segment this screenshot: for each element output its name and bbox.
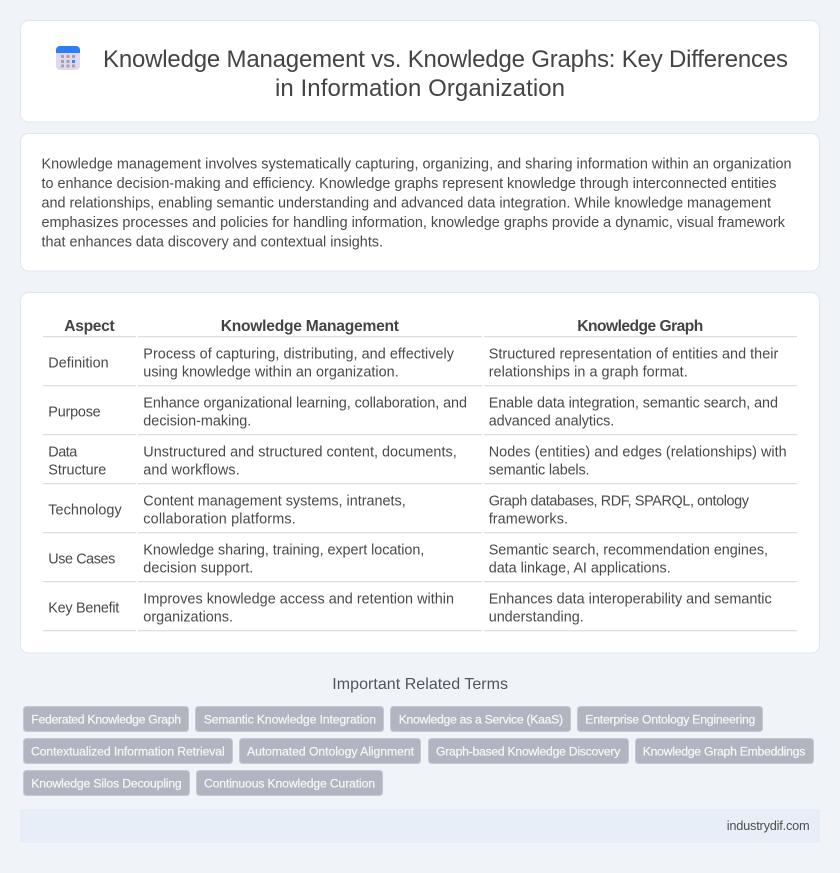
table row: Key Benefit: understanding. — [489, 609, 584, 625]
table header row: Aspect — [64, 318, 115, 335]
table row: Definition — [43, 346, 797, 386]
icon: calendar — [56, 46, 80, 70]
tag: Automated Ontology Alignment — [247, 744, 415, 758]
table row: Data Structure: Unstructured and structured content, documents, — [143, 444, 457, 460]
table row: Purpose — [43, 395, 797, 435]
tag — [196, 706, 384, 732]
table row: Data Structure — [43, 444, 797, 484]
table row: Purpose: Enable data integration, semantic search, and — [489, 395, 778, 411]
table row: Key Benefit: Key Benefit — [48, 600, 119, 616]
tag — [24, 706, 188, 732]
table row: Purpose: Enhance organizational learning, collaboration, and — [143, 395, 467, 411]
text block: summary: and relationships, enabling semantic understanding and advanced data integration. While knowledge management — [42, 195, 771, 211]
table row: Data Structure: Data — [48, 444, 77, 460]
text block: summary: emphasizes processes and policies for handling information, knowledge graphs provide a dynamic, visual framework — [42, 215, 786, 231]
text block: summary — [42, 156, 792, 250]
text block: summary: that enhances data discovery and contextual insights. — [42, 234, 383, 250]
title — [103, 46, 788, 102]
tag — [636, 738, 814, 764]
tag: Continuous Knowledge Curation — [204, 776, 375, 790]
table header row: Knowledge Graph — [577, 318, 703, 335]
tag — [390, 706, 570, 732]
title: Knowledge Management vs. Knowledge Graphs: Key Differences — [103, 46, 788, 73]
table row: Technology: Content management systems, intranets, — [143, 493, 406, 509]
related terms tags — [24, 706, 814, 796]
table row: Purpose: Purpose — [48, 404, 101, 420]
table row: Data Structure: Structure — [48, 462, 106, 478]
table row: Technology: frameworks. — [489, 511, 568, 527]
tag: Knowledge Silos Decoupling — [31, 776, 182, 790]
tag: Knowledge as a Service (KaaS) — [399, 712, 563, 726]
table row: Key Benefit — [43, 591, 797, 631]
panel: comparison table — [20, 292, 820, 653]
table row: Use Cases: decision support. — [143, 560, 253, 576]
tag — [24, 770, 190, 796]
heading: Important Related Terms: Important Related Terms — [332, 676, 508, 693]
tag — [240, 738, 420, 764]
table row: Technology: Technology — [48, 502, 122, 518]
tag — [24, 738, 232, 764]
title: in Information Organization — [275, 75, 565, 102]
table row: Technology — [43, 493, 797, 533]
footer — [20, 809, 820, 843]
tag: Enterprise Ontology Engineering — [585, 712, 755, 726]
panel: summary paragraph — [20, 134, 820, 271]
tag: Contextualized Information Retrieval — [31, 744, 225, 758]
table row: Definition: using knowledge within an organization. — [143, 364, 399, 380]
table row: Technology: Graph databases, RDF, SPARQL, ontology — [489, 493, 750, 509]
table row: Definition: relationships in a graph format. — [489, 364, 688, 380]
panel: title card — [20, 20, 820, 122]
tag — [578, 706, 762, 732]
table header row: Knowledge Management — [221, 318, 399, 335]
table row: Use Cases — [43, 542, 797, 582]
table row: Data Structure: semantic labels. — [489, 462, 590, 478]
footer: industrydif.com — [727, 818, 810, 833]
table row: Technology: collaboration platforms. — [143, 511, 296, 527]
table row: Data Structure: and workflows. — [143, 462, 240, 478]
table row: Data Structure: Nodes (entities) and edges (relationships) with — [489, 444, 787, 460]
table row: Use Cases: Semantic search, recommendation engines, — [489, 542, 768, 558]
table row: Use Cases: Use Cases — [48, 551, 115, 567]
tag: Federated Knowledge Graph — [31, 712, 181, 726]
table row: Key Benefit: Improves knowledge access and retention within — [143, 591, 454, 607]
table row: Use Cases: Knowledge sharing, training, expert location, — [143, 542, 424, 558]
tag: Semantic Knowledge Integration — [204, 712, 376, 726]
tag: Knowledge Graph Embeddings — [643, 744, 805, 758]
table header row — [43, 318, 797, 337]
tag: Graph-based Knowledge Discovery — [436, 744, 621, 758]
table row: Key Benefit: organizations. — [143, 609, 233, 625]
table row: Purpose: decision-making. — [143, 413, 251, 429]
text block: summary: to enhance decision-making and efficiency. Knowledge graphs represent knowledge through interconnected entities — [42, 176, 776, 192]
table row: Definition: Definition — [48, 355, 109, 371]
text block: summary: Knowledge management involves systematically capturing, organizing, and sharing information within an organization — [42, 156, 792, 172]
table row: Purpose: advanced analytics. — [489, 413, 614, 429]
tag — [428, 738, 628, 764]
table row: Use Cases: data linkage, AI applications. — [489, 560, 671, 576]
tag — [196, 770, 382, 796]
table row: Key Benefit: Enhances data interoperability and semantic — [489, 591, 772, 607]
table row: Definition: Structured representation of entities and their — [489, 346, 779, 362]
table row: Definition: Process of capturing, distributing, and effectively — [143, 346, 455, 362]
